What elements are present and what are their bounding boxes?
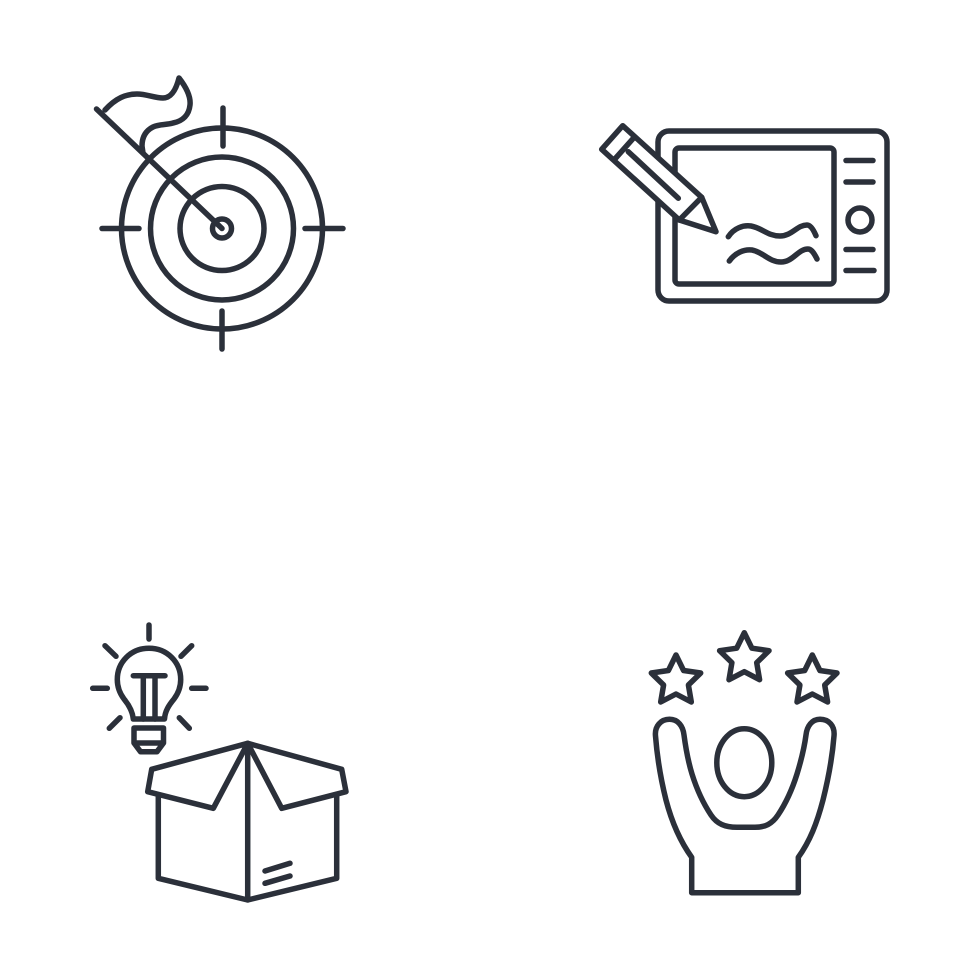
box flaps [148, 743, 346, 808]
tablet body [658, 131, 887, 301]
icon: light bulb over open box [93, 625, 346, 900]
target rings [122, 128, 322, 329]
raised arms and torso [655, 719, 834, 893]
icon: graphics tablet with pencil [602, 126, 887, 301]
pencil [602, 126, 716, 232]
right star [788, 655, 837, 702]
bulb rays [93, 625, 206, 728]
flag pole [96, 109, 222, 228]
icon: person with raised arms and three stars [651, 633, 837, 893]
flag banner [105, 78, 190, 153]
head [717, 729, 772, 797]
tablet screen [675, 148, 834, 284]
scribble lines [728, 225, 817, 262]
middle star [720, 633, 769, 680]
box label lines [265, 863, 290, 883]
icon: target with flag [96, 78, 343, 349]
crosshair ticks [102, 108, 343, 349]
tablet buttons [846, 160, 874, 270]
box body [158, 743, 337, 900]
light bulb [117, 648, 181, 752]
left star [651, 655, 701, 702]
